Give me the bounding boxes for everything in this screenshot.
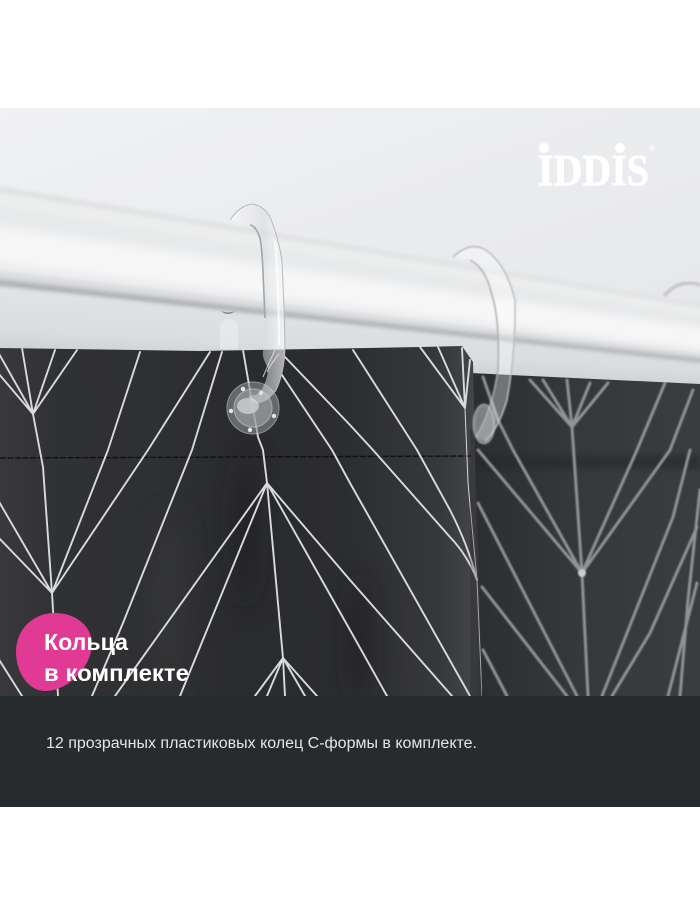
heading: Кольца в комплекте (44, 629, 189, 686)
icon: clear C-shaped ring (230, 204, 285, 404)
photo: wall (0, 108, 700, 390)
infographic canvas (0, 108, 700, 807)
icon: back ring (453, 247, 515, 443)
seam (0, 456, 472, 458)
logo: IDDIS: IDDIS (538, 146, 649, 195)
back curtain line pattern (478, 377, 700, 696)
icon: peg on rod (220, 311, 238, 349)
heading: Кольца в комплекте: Кольца (44, 629, 128, 655)
photo: back curtain (465, 370, 700, 700)
caption text: 12 прозрачных пластиковых колец С-формы в комплекте. (46, 735, 477, 752)
photo: front curtain (0, 340, 490, 710)
badge: pink blob (16, 613, 92, 691)
front curtain line pattern (0, 347, 477, 696)
icon: grommet (227, 382, 279, 434)
heading: Кольца в комплекте: в комплекте (44, 660, 189, 686)
panel: dark caption bar (0, 696, 700, 807)
icon: third blurred ring (664, 283, 700, 296)
photo: curtain rod (0, 185, 700, 363)
